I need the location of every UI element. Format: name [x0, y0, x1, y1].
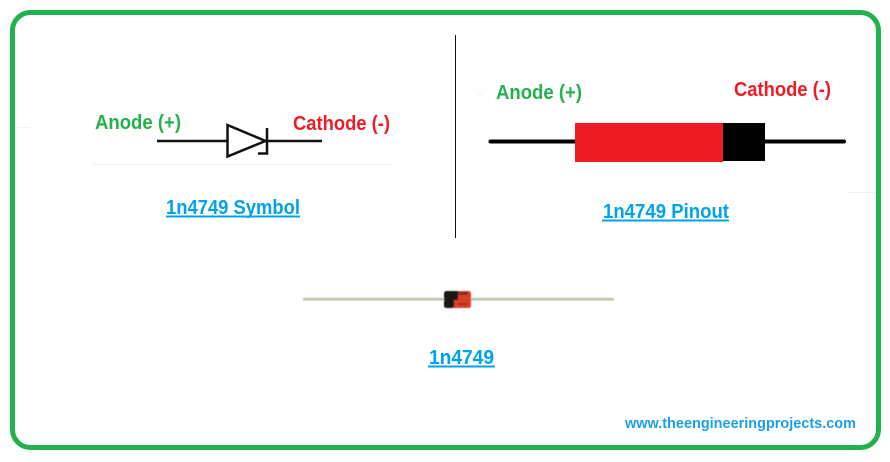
panel: pinout — [490, 79, 844, 223]
website url: www.theengineeringprojects.com — [624, 416, 856, 432]
label: pinout anode: Anode (+) — [496, 82, 582, 104]
icon: diode package drawing — [490, 123, 844, 162]
panel: symbol — [95, 112, 390, 219]
heading: 1n4749 Symbol: 1n4749 Symbol — [166, 197, 300, 219]
icon: zener diode symbol — [157, 125, 322, 156]
label: symbol cathode: Cathode (-) — [293, 113, 390, 135]
label: symbol anode: Anode (+) — [95, 112, 181, 134]
label: pinout cathode: Cathode (-) — [734, 79, 831, 101]
illustration: 1n4749 diode photo — [303, 291, 614, 308]
heading: 1n4749 Pinout: 1n4749 Pinout — [603, 201, 729, 223]
panel: component photo — [303, 291, 614, 369]
divider: vertical line — [455, 35, 456, 238]
heading: 1n4749: 1n4749 — [429, 347, 494, 369]
